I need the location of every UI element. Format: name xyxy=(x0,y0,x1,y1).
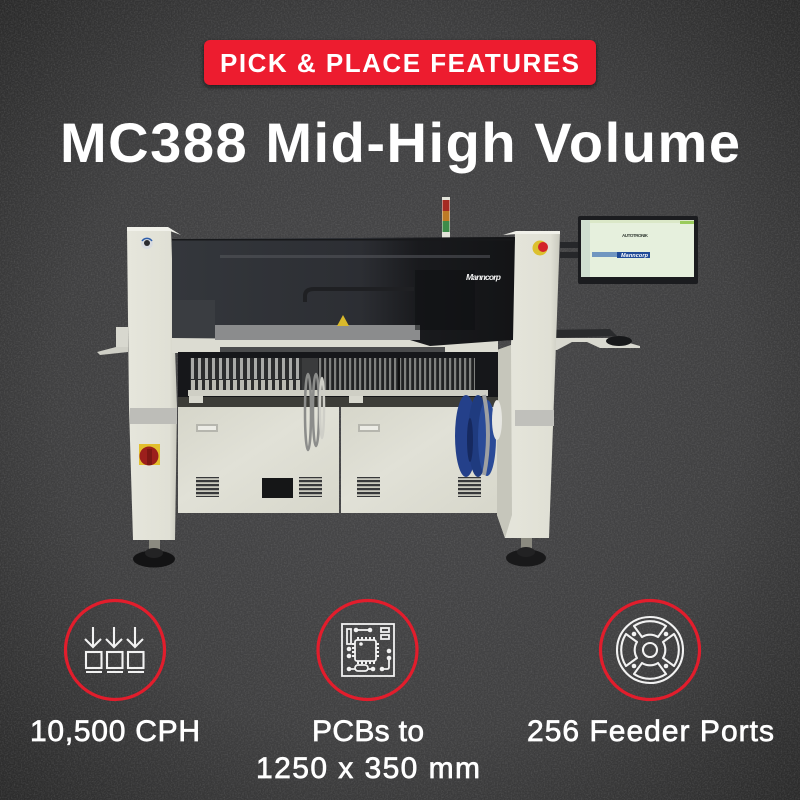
icon: three arrows over placed parts xyxy=(66,600,164,700)
monitor arm xyxy=(560,242,580,248)
left side tray xyxy=(97,327,128,355)
label: PCBs to 1250 x 350 mm: 1250 x 350 mm xyxy=(256,752,480,785)
feeder bank xyxy=(178,347,498,407)
banner: pick and place features: PICK & PLACE FEATURES xyxy=(220,48,579,78)
left column xyxy=(127,227,181,540)
foot: left leveling pad xyxy=(133,540,175,568)
cabinet: left door xyxy=(178,407,339,513)
brand name on glass: Manncorp xyxy=(466,272,501,282)
icon: printed circuit board xyxy=(318,600,417,700)
monitor xyxy=(578,216,698,284)
label: 10,500 CPH: 10,500 CPH xyxy=(30,715,200,748)
keyboard tray xyxy=(541,329,640,350)
cabinet: right door xyxy=(341,407,497,513)
monitor: AUTOTRONIK xyxy=(622,233,649,238)
icon: emergency stop button xyxy=(532,240,548,256)
banner: pick and place features xyxy=(204,40,596,87)
monitor arm lower xyxy=(560,252,580,258)
inner frame below glass xyxy=(172,325,498,353)
dark glass hood xyxy=(172,237,515,346)
feature: board size xyxy=(256,600,480,785)
foot: right leveling pad xyxy=(506,538,546,566)
icon: left selector knob xyxy=(141,237,153,249)
label: 256 Feeder Ports: 256 Feeder Ports xyxy=(527,715,774,748)
component tape reels: blue xyxy=(455,395,502,477)
label: PCBs to 1250 x 350 mm xyxy=(256,715,480,785)
machine: pick and place xyxy=(97,197,698,568)
icon: laser warning triangle xyxy=(337,315,349,326)
monitor: Manncorp xyxy=(621,253,649,259)
title: MC388 Mid-High Volume xyxy=(60,111,740,174)
right column xyxy=(497,231,560,538)
feature: feeder ports xyxy=(527,600,774,748)
signal tower light xyxy=(442,197,450,238)
label: PCBs to 1250 x 350 mm: PCBs to xyxy=(312,715,424,748)
icon: main power switch xyxy=(139,444,160,466)
component tape reels: thin xyxy=(305,374,324,450)
feature: placement speed xyxy=(30,600,200,748)
icon: feeder reel xyxy=(600,600,700,700)
